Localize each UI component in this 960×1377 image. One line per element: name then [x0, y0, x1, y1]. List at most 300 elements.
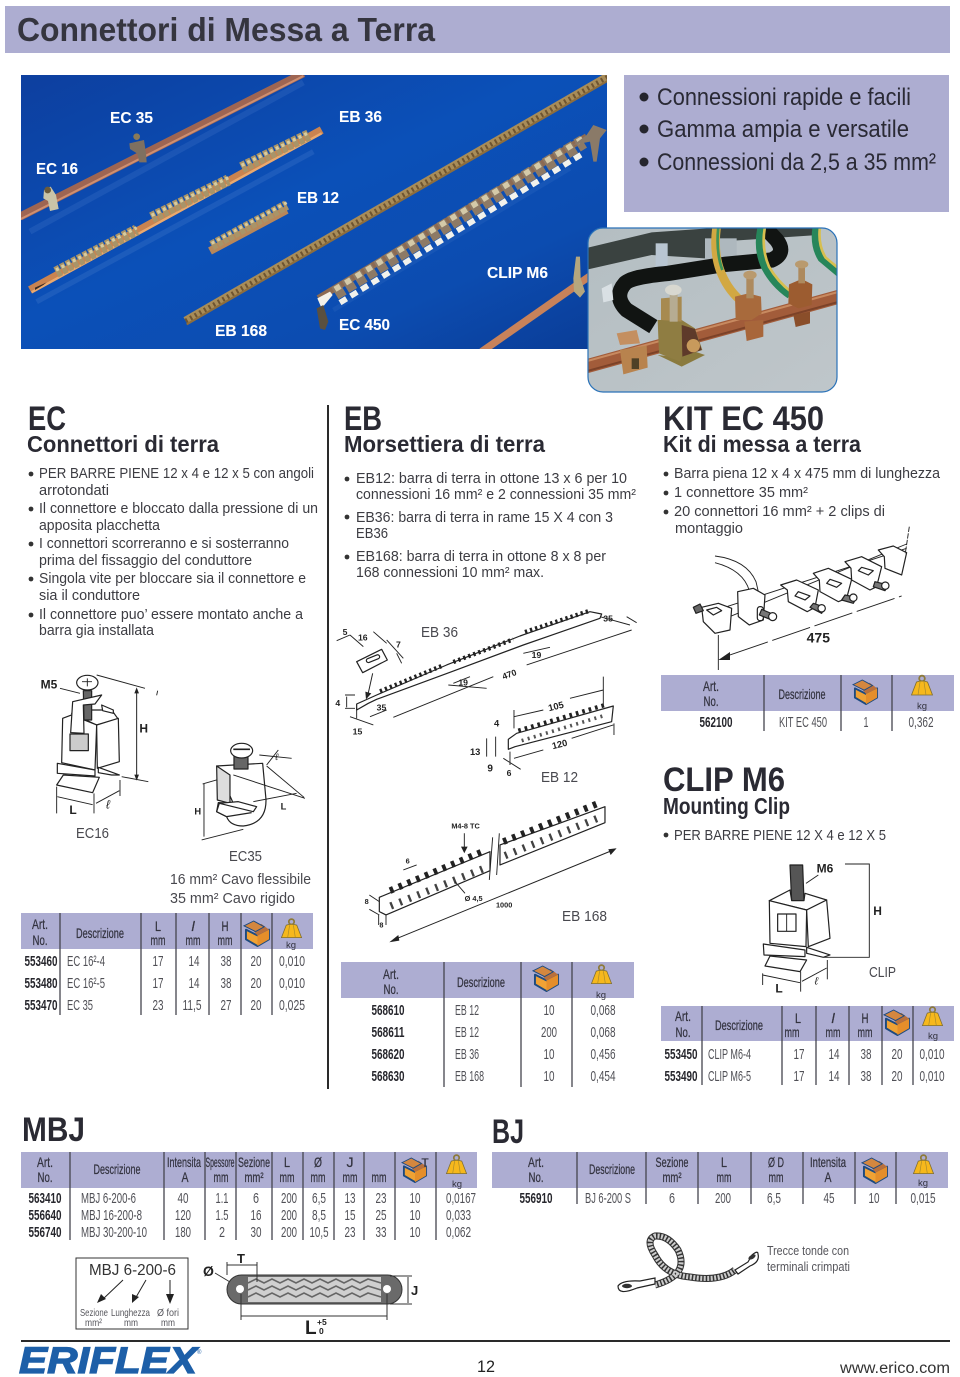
diagram: EC35 clip	[194, 743, 305, 840]
label: EC16: EC16	[76, 826, 109, 842]
table: EB: EB 168	[455, 1068, 484, 1085]
table: MBJ: 10	[410, 1224, 420, 1241]
text block: EC features: I connettori scorreranno e si sosterranno	[39, 536, 289, 552]
table: MBJ: mm	[280, 1169, 294, 1185]
table: EC: No.	[32, 932, 48, 948]
table: CLIP M6: 20	[892, 1068, 902, 1085]
diagram: EC16 clip: ℓ	[106, 797, 111, 811]
photo labels: EC 35	[110, 110, 153, 127]
section: KIT EC 450 heading: Kit di messa a terra	[663, 431, 861, 457]
icon: weight: kg	[286, 940, 296, 951]
diagram: EB 168 bar: 1000	[496, 901, 512, 910]
text block: EB features: EB36	[356, 526, 388, 542]
table: BJ: L	[721, 1154, 727, 1170]
diagram: EB 36 and EB 12 bars: 6	[507, 768, 512, 778]
table: BJ: Intensita	[810, 1154, 846, 1170]
table: EC: 14	[188, 953, 200, 970]
diagram: EB 36 and EB 12 bars: 5	[343, 627, 348, 637]
table: EB: EB 36	[455, 1046, 479, 1063]
diagram: EB 36 and EB 12 bars: 4	[335, 698, 340, 708]
table: CLIP M6: mm	[784, 1024, 800, 1040]
inset photo: clips mounted on copper bar	[585, 227, 842, 392]
table: EC: 0,010	[279, 975, 305, 992]
table: EB: Descrizione	[457, 974, 505, 990]
table: EC: 11,5	[182, 997, 202, 1014]
table: CLIP M6: No.	[676, 1024, 690, 1040]
label: EB 168: EB 168	[562, 909, 607, 925]
icon: package box	[402, 1158, 426, 1182]
table: CLIP M6: l	[831, 1010, 835, 1026]
table: EC: 20	[250, 975, 262, 992]
diagram: EB 168 bar: 8	[365, 897, 369, 906]
table: EC: l	[191, 918, 195, 934]
text block: KIT features: montaggio	[675, 521, 743, 537]
icon: weight: kg	[918, 1178, 928, 1189]
table: CLIP M6: 17	[794, 1068, 804, 1085]
table: MBJ: 1.1	[216, 1190, 228, 1207]
table: EB: 0,068	[590, 1002, 616, 1019]
callout: MBJ code legend: Sezione	[80, 1307, 108, 1319]
table: MBJ: 23	[376, 1190, 386, 1207]
table: CLIP M6: mm	[826, 1024, 840, 1040]
website url: www.erico.com	[839, 1360, 950, 1377]
labels: EC35 and cable capacity: EC35	[229, 849, 262, 865]
table: EB: EB 12	[455, 1002, 479, 1019]
table: MBJ: 1.5	[216, 1207, 228, 1224]
table: KIT EC 450	[661, 675, 954, 731]
table: CLIP M6: Descrizione	[715, 1017, 763, 1033]
table: EC: Descrizione	[76, 925, 124, 941]
diagram: EC35 clip: H	[194, 806, 201, 816]
table: EB: 568630	[372, 1068, 404, 1085]
table: MBJ: Sezione	[238, 1154, 270, 1170]
table: BJ: 0,015	[910, 1190, 936, 1207]
diagram: CLIP M6: ℓ	[814, 976, 819, 988]
table: BJ: mm²	[662, 1169, 682, 1185]
table: CLIP M6: 0,010	[920, 1046, 944, 1063]
table: MBJ: mm	[372, 1169, 386, 1185]
photo labels: EB 12	[297, 190, 339, 207]
panel: key benefits: Connessioni rapide e facili	[657, 84, 911, 111]
icon: package box	[884, 1010, 909, 1035]
diagram: MBJ flat braid: J	[411, 1283, 418, 1298]
diagram: EB 36 and EB 12 bars	[335, 611, 637, 778]
page number: 12	[477, 1357, 495, 1376]
diagram: CLIP M6: L	[775, 982, 783, 996]
table: EC: 553480	[24, 975, 58, 992]
table: EC: mm	[150, 932, 166, 948]
diagram: MBJ flat braid: Ø	[203, 1263, 214, 1279]
table: MBJ: No.	[38, 1169, 52, 1185]
diagram: EB 36 and EB 12 bars: 9	[487, 764, 493, 775]
table: CLIP M6: mm	[858, 1024, 872, 1040]
section: EB heading	[344, 400, 545, 457]
diagram: EC35 clip: ℓ	[274, 752, 278, 762]
text block: EB features: EB36: barra di terra in rame 15 X 4 con 3	[356, 510, 613, 526]
table: CLIP M6: 0,010	[920, 1068, 944, 1085]
table: EC: 38	[220, 953, 232, 970]
diagram: EB 36 and EB 12 bars: 19	[458, 677, 468, 687]
text block: EB features: EB168: barra di terra in ottone 8 x 8 per	[356, 549, 606, 565]
table: KIT EC 450: No.	[704, 693, 718, 709]
text block: EB features: EB12: barra di terra in ottone 13 x 6 per 10	[356, 471, 627, 487]
diagram: KIT EC 450: 475	[807, 630, 830, 646]
table: CLIP M6: 20	[892, 1046, 902, 1063]
text block: EC features	[29, 466, 318, 639]
table: BJ: 556910	[520, 1190, 552, 1207]
callout: MBJ code legend: mm²	[85, 1317, 102, 1329]
text block: KIT features	[664, 466, 941, 537]
text block: EC features: apposita placchetta	[39, 518, 161, 534]
table: CLIP M6: CLIP M6-4	[708, 1046, 751, 1063]
diagram: EB 36 and EB 12 bars: 7	[396, 640, 401, 650]
table: EC: 17	[152, 953, 164, 970]
table: BJ: Descrizione	[589, 1161, 635, 1177]
table: EC: 20	[250, 997, 262, 1014]
table: MBJ: 30	[250, 1224, 262, 1241]
diagram: KIT EC 450	[693, 527, 909, 670]
heading: BJ: BJ	[492, 1113, 524, 1151]
table: CLIP M6: 38	[860, 1046, 872, 1063]
diagram: BJ round braid	[618, 1236, 758, 1292]
table: EC: EC 35	[67, 997, 93, 1014]
table: BJ: mm	[768, 1169, 784, 1185]
diagram: EB 36 and EB 12 bars: 470	[501, 667, 518, 682]
text block: EC features: sia il conduttore	[39, 588, 140, 604]
table: KIT EC 450: 562100	[700, 714, 732, 731]
divider line between EC and EB	[327, 405, 329, 1089]
diagram: CLIP M6: M6	[817, 862, 834, 876]
section: CLIP M6 heading: Mounting Clip	[663, 793, 790, 819]
table: BJ: A	[824, 1169, 832, 1185]
diagram: EB 36 and EB 12 bars: 13	[470, 747, 480, 757]
icon: weight	[912, 676, 932, 712]
table: MBJ: Descrizione	[94, 1161, 141, 1177]
table: MBJ: T	[421, 1156, 429, 1170]
table: MBJ: mm	[342, 1169, 358, 1185]
section: EC heading: Connettori di terra	[27, 431, 219, 457]
table: MBJ: 25	[376, 1207, 386, 1224]
table: MBJ: MBJ 16-200-8	[81, 1207, 142, 1224]
callout: MBJ code legend: mm	[124, 1317, 138, 1329]
icon: package box	[533, 966, 558, 991]
table: BJ: mm	[716, 1169, 732, 1185]
table: EC: 553470	[24, 997, 58, 1014]
panel: key benefits	[624, 75, 949, 212]
table: EB: No.	[384, 981, 398, 997]
diagram: MBJ flat braid: +5	[317, 1317, 327, 1327]
table: MBJ	[21, 1152, 477, 1241]
table: EC: mm	[218, 932, 232, 948]
diagram: EB 36 and EB 12 bars: 35	[603, 614, 613, 624]
text block: EC features: arrotondati	[39, 483, 109, 499]
text block: EB features: connessioni 16 mm² e 2 connessioni 35 mm²	[356, 487, 636, 503]
table: CLIP M6: 553450	[664, 1046, 698, 1063]
table: MBJ: Ø	[314, 1154, 322, 1170]
diagram: EB 168 bar: 8	[379, 921, 383, 930]
callout: MBJ code legend: Lunghezza	[111, 1307, 150, 1319]
table: BJ: 6	[669, 1190, 675, 1207]
table: BJ: Sezione	[656, 1154, 689, 1170]
photo bar: EB 36	[30, 130, 322, 302]
table: EB: 0,068	[590, 1024, 616, 1041]
table: KIT EC 450: Art.	[703, 678, 719, 694]
photo labels	[36, 109, 548, 340]
table: CLIP M6: 14	[828, 1068, 840, 1085]
table: MBJ: L	[284, 1154, 290, 1170]
text block: KIT features: Barra piena 12 x 4 x 475 mm di lunghezza	[674, 466, 941, 482]
table: MBJ: 10	[410, 1207, 420, 1224]
diagram: EC16 clip: M5	[41, 678, 58, 692]
table: CLIP M6: H	[862, 1010, 868, 1026]
table: BJ: BJ 6-200 S	[585, 1190, 631, 1207]
table: EC: 17	[152, 975, 164, 992]
icon: weight: kg	[596, 990, 606, 1001]
diagram: CLIP M6: H	[873, 904, 882, 918]
photo labels: EB 168	[215, 323, 267, 340]
table: MBJ: 200	[281, 1190, 297, 1207]
table: EC	[21, 913, 313, 1015]
section: EC heading	[27, 400, 219, 457]
table: MBJ: mm²	[244, 1169, 264, 1185]
footer rule	[21, 1340, 950, 1342]
diagram: MBJ flat braid: T	[237, 1251, 245, 1266]
section: EB heading: Morsettiera di terra	[344, 431, 545, 457]
table: MBJ: 10,5	[310, 1224, 328, 1241]
label: EB 12: EB 12	[541, 770, 578, 786]
labels: EC35 and cable capacity	[170, 849, 311, 907]
diagram: EB 36 and EB 12 bars: 15	[353, 726, 362, 736]
logo: ERIFLEX: ®	[197, 1349, 202, 1356]
table: EC: 27	[220, 997, 232, 1014]
table: EC: Art.	[32, 916, 48, 932]
table: EB: 10	[544, 1046, 554, 1063]
text block: EC features: Singola vite per bloccare sia il connettore e	[39, 571, 306, 587]
diagram: MBJ flat braid: 0	[319, 1326, 324, 1336]
section: EC heading: EC	[28, 400, 66, 438]
text block: EC features: Il connettore puo’ essere montato anche a	[39, 607, 304, 623]
diagram: CLIP M6	[763, 862, 882, 996]
photo labels: EB 36	[339, 109, 382, 126]
callout: MBJ code legend	[76, 1258, 188, 1329]
icon: weight: kg	[452, 1179, 462, 1190]
table: EB: 568611	[372, 1024, 404, 1041]
icon: weight: kg	[917, 701, 927, 712]
table: MBJ: Art.	[37, 1154, 53, 1170]
diagram: EC16 clip	[41, 675, 158, 817]
photo bar: EB 168	[186, 72, 617, 324]
table: EC: 553460	[24, 953, 58, 970]
table: EC: L	[155, 918, 161, 934]
table: MBJ: 40	[178, 1190, 188, 1207]
table: KIT EC 450: KIT EC 450	[779, 714, 827, 731]
table: CLIP M6: 14	[828, 1046, 840, 1063]
icon: weight	[922, 1007, 943, 1042]
text block: CLIP feature: PER BARRE PIENE 12 X 4 e 12 X 5	[674, 828, 886, 844]
table: MBJ: 6,5	[312, 1190, 326, 1207]
table: EC: 0,025	[279, 997, 305, 1014]
table: EB: 568620	[372, 1046, 404, 1063]
table: CLIP M6: 17	[794, 1046, 804, 1063]
table: EC: H	[222, 918, 228, 934]
table: CLIP M6: CLIP M6-5	[708, 1068, 751, 1085]
photo labels: CLIP M6	[487, 265, 548, 282]
table: MBJ: 556640	[28, 1207, 62, 1224]
table: MBJ: 0,062	[446, 1224, 471, 1241]
table: MBJ: MBJ 6-200-6	[81, 1190, 136, 1207]
table: BJ: Ø D	[768, 1154, 784, 1170]
section: EB heading: EB	[344, 400, 382, 438]
table: BJ: 6,5	[767, 1190, 781, 1207]
table: CLIP M6	[661, 1006, 954, 1085]
diagram: EB 36 and EB 12 bars: 120	[551, 738, 568, 751]
table: KIT EC 450: 0,362	[908, 714, 934, 731]
table: MBJ: 15	[344, 1207, 356, 1224]
diagram: EB 168 bar: Ø 4,5	[465, 894, 483, 903]
icon: package box	[862, 1158, 887, 1183]
table: MBJ: 8,5	[312, 1207, 326, 1224]
table: EC: 23	[152, 997, 164, 1014]
table: MBJ: 23	[344, 1224, 356, 1241]
labels: EC35 and cable capacity: 35 mm² Cavo rigido	[170, 891, 295, 907]
product photo: grounding bars on blue background	[20, 72, 617, 352]
table: MBJ: 556740	[28, 1224, 62, 1241]
table: MBJ: 200	[281, 1224, 297, 1241]
photo bar: CLIP M6 bar	[480, 256, 588, 349]
table: EB: 200	[541, 1024, 557, 1041]
table: MBJ: 0,033	[446, 1207, 471, 1224]
table: MBJ: 200	[281, 1207, 297, 1224]
diagram: EB 168 bar: M4-8 TC	[451, 822, 481, 831]
text block: EB features	[345, 471, 636, 581]
icon: weight	[591, 965, 612, 1001]
table: CLIP M6: 38	[860, 1068, 872, 1085]
section: KIT EC 450 heading: KIT EC 450	[663, 400, 824, 438]
table: EC: 0,010	[279, 953, 305, 970]
table: EB: EB 12	[455, 1024, 479, 1041]
icon: weight	[913, 1155, 934, 1189]
heading: MBJ: MBJ	[22, 1111, 85, 1149]
section: KIT EC 450 heading	[663, 400, 861, 457]
text block: BJ note	[767, 1244, 850, 1274]
table: EC: 38	[220, 975, 232, 992]
table: EB: 10	[544, 1002, 554, 1019]
table: BJ	[492, 1152, 948, 1207]
callout: MBJ code legend: MBJ 6-200-6	[89, 1262, 176, 1279]
table: CLIP M6: 553490	[664, 1068, 698, 1085]
table: EC: 14	[188, 975, 200, 992]
table: MBJ: 33	[376, 1224, 386, 1241]
text block: EC features: PER BARRE PIENE 12 x 4 e 12 x 5 con angoli	[39, 466, 314, 482]
table: EB: 10	[544, 1068, 554, 1085]
table: EB: 0,454	[590, 1068, 616, 1085]
table: CLIP M6: L	[795, 1010, 801, 1026]
text block: KIT features: 1 connettore 35 mm²	[674, 485, 808, 501]
diagram: EB 36 and EB 12 bars: 19	[532, 650, 541, 660]
table: MBJ: 563410	[28, 1190, 62, 1207]
photo bar: EC 450 kit	[317, 125, 607, 330]
table: MBJ: J	[346, 1154, 354, 1170]
table: BJ: No.	[528, 1169, 544, 1185]
table: CLIP M6: Art.	[675, 1008, 691, 1024]
table: EB: Art.	[383, 966, 399, 982]
diagram: MBJ flat braid	[203, 1251, 418, 1339]
icon: weight: kg	[928, 1031, 938, 1042]
table: KIT EC 450: Descrizione	[778, 686, 826, 702]
table: MBJ: 2	[219, 1224, 225, 1241]
text block: BJ note: terminali crimpati	[767, 1260, 850, 1274]
icon: package box	[853, 680, 877, 704]
diagram: EB 168 bar: 6	[406, 856, 410, 865]
diagram: EB 168 bar	[365, 803, 617, 942]
table: MBJ: 13	[344, 1190, 356, 1207]
section: CLIP M6 heading	[663, 761, 790, 819]
title band	[5, 6, 950, 53]
icon: weight	[446, 1155, 467, 1190]
text block: BJ note: Trecce tonde con	[767, 1244, 849, 1258]
diagram: EC16 clip: H	[139, 722, 148, 736]
table: MBJ: 16	[250, 1207, 262, 1224]
diagram: EC16 clip: L	[69, 803, 77, 817]
diagram: EB 36 and EB 12 bars: 4	[494, 719, 500, 729]
table: MBJ: 6	[253, 1190, 259, 1207]
table: MBJ: 10	[410, 1190, 420, 1207]
table: MBJ: mm	[214, 1169, 228, 1185]
text block: EC features: barra gia installata	[39, 623, 155, 639]
title band: Connettori di Messa a Terra	[17, 11, 436, 48]
diagram: EB 36 and EB 12 bars: 16	[358, 633, 368, 643]
icon: package box	[244, 921, 269, 946]
text block: EC features: prima del fissaggio del conduttore	[39, 553, 252, 569]
table: MBJ: MBJ 30-200-10	[81, 1224, 147, 1241]
photo bar: EC clips bar	[20, 73, 303, 232]
text block: KIT features: 20 connettori 16 mm² + 2 clips di	[674, 504, 885, 520]
callout: MBJ code legend: Ø fori	[157, 1307, 179, 1319]
table: EB: 568610	[372, 1002, 404, 1019]
table: BJ: 10	[868, 1190, 880, 1207]
table: EC: EC 16²-5	[67, 975, 105, 992]
photo labels: EC 16	[36, 161, 78, 178]
panel: key benefits: Gamma ampia e versatile	[657, 116, 909, 143]
labels: EC35 and cable capacity: 16 mm² Cavo flessibile	[170, 872, 311, 888]
table: EC: 20	[250, 953, 262, 970]
section: CLIP M6 heading: CLIP M6	[663, 761, 785, 799]
table: BJ: Art.	[528, 1154, 544, 1170]
text block: EC features: Il connettore e bloccato dalla pressione di un	[39, 501, 318, 517]
table: BJ: 200	[715, 1190, 731, 1207]
photo bar: EB 12	[210, 203, 287, 251]
text block: EB features: 168 connessioni 10 mm² max.	[356, 565, 544, 581]
diagram: EC35 clip: L	[281, 801, 287, 811]
table: BJ: 45	[824, 1190, 834, 1207]
table: MBJ: Intensita	[167, 1154, 201, 1170]
table: MBJ: 120	[175, 1207, 191, 1224]
icon: weight	[281, 919, 302, 951]
diagram: MBJ flat braid: L	[305, 1318, 317, 1339]
table: KIT EC 450: 1	[864, 714, 868, 731]
table: EB: 0,456	[590, 1046, 616, 1063]
table: MBJ: A	[182, 1169, 189, 1185]
photo labels: EC 450	[339, 317, 390, 334]
diagram: EB 36 and EB 12 bars: 35	[377, 703, 386, 713]
table: MBJ: 180	[175, 1224, 191, 1241]
table: MBJ: 0,0167	[446, 1190, 476, 1207]
table: MBJ: mm	[310, 1169, 326, 1185]
table: EC: EC 16²-4	[67, 953, 105, 970]
table: EB	[341, 962, 634, 1087]
diagram: EB 36 and EB 12 bars: 105	[547, 700, 565, 713]
table: MBJ: Spessore	[206, 1154, 235, 1170]
